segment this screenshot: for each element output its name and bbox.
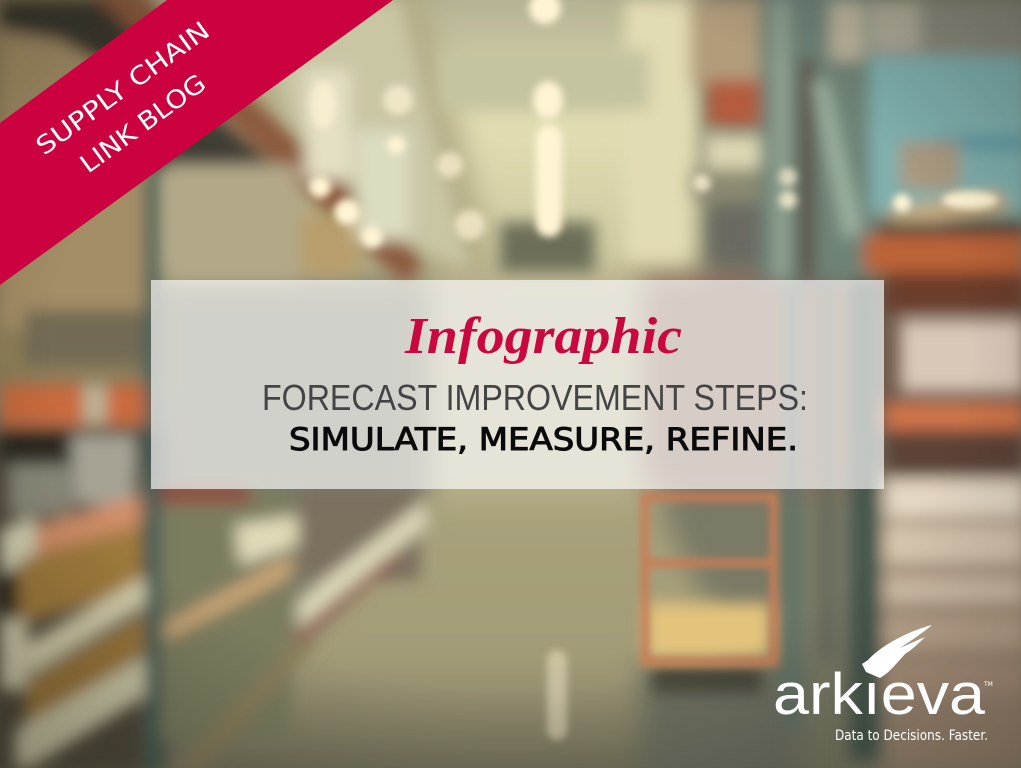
ribbon: supply chain link blog: LINK BLOG bbox=[74, 68, 211, 179]
left shelving bbox=[0, 384, 150, 426]
right middle bbox=[900, 320, 1021, 392]
upper left boxes and beam bbox=[0, 20, 145, 330]
ribbon: supply chain link blog: SUPPLY CHAIN bbox=[30, 16, 215, 161]
ribbon: supply chain link blog bbox=[0, 0, 393, 285]
heading: script label: Infographic bbox=[404, 308, 682, 365]
subtitle line: SIMULATE, MEASURE, REFINE. bbox=[289, 422, 798, 458]
middle shelving bbox=[162, 490, 292, 740]
right top bbox=[625, 0, 690, 260]
title line: FORECAST IMPROVEMENT STEPS: bbox=[262, 377, 808, 418]
logo: arkieva: arkıeva bbox=[773, 662, 986, 727]
logo: arkieva: TM bbox=[983, 681, 993, 688]
logo: arkieva bbox=[773, 625, 993, 744]
panel: translucent title band bbox=[151, 280, 884, 489]
logo: arkieva: Data to Decisions. Faster. bbox=[835, 728, 988, 744]
cart frame bbox=[645, 497, 774, 662]
